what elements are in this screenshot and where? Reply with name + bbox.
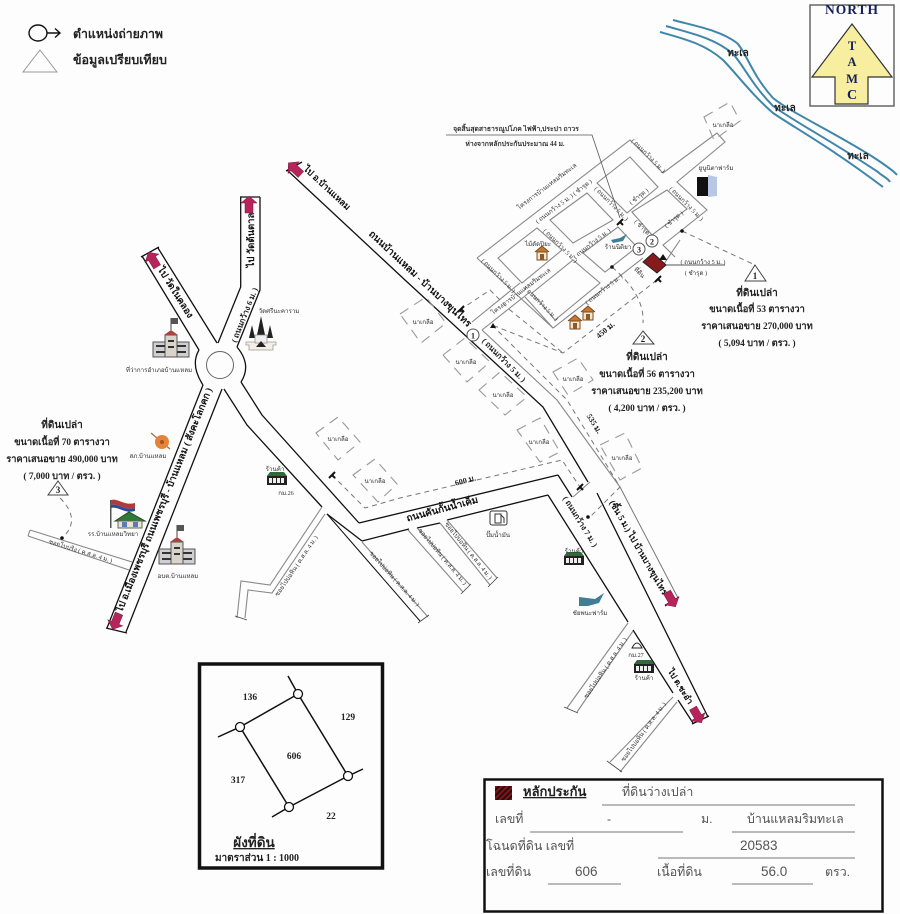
comparison 2: ( 4,200 บาท / ตรว. ) (608, 403, 686, 414)
estate road labels: ( ชำรุด ) (628, 187, 650, 206)
road labels: ( ถนนกว้าง 5 ม. ) (480, 336, 528, 384)
road labels: (ซิ้น 5 ม.) ไป บ้านบางขุนไทร (607, 497, 672, 597)
road network (28, 162, 709, 772)
comparison 1 (701, 265, 813, 349)
icon: shop in estate (611, 234, 627, 243)
road: to Bang Khun Sai (620, 487, 678, 598)
plot numbers: 606 (287, 752, 301, 762)
legend: photo position label: ตำแหน่งถ่ายภาพ (73, 27, 163, 41)
legend: photo position symbol (29, 25, 60, 41)
salt farm plots: นาเกลือ (611, 454, 633, 462)
land type: ที่ดินว่างเปล่า (622, 783, 693, 799)
dashed distance routes (60, 231, 755, 538)
estate road labels: ( ถนนกว้าง 5 ม. ) (572, 226, 612, 260)
estate road labels: ( ถนนกว้าง 5 ม. ) (542, 227, 579, 264)
address row: บ้านแหลมริมทะเล (747, 812, 844, 826)
road: north to Wat Ton Tan (218, 197, 260, 347)
river: sea: ทะเล (847, 151, 869, 162)
soi labels (48, 520, 668, 763)
landmarks (88, 164, 733, 682)
road labels: ถนนคันกั้นน้ำเค็ม (405, 492, 479, 524)
soi labels: ซอยไปบ่อหิน ( ค.ส.ล. 4 ม. ) (273, 534, 320, 598)
road labels: ไป อ.บ้านแหลม (301, 162, 353, 212)
estate road labels: ( ถนนกว้าง 5 ม. ) (593, 185, 630, 222)
sois (28, 507, 677, 772)
road labels: ไป อ.เมืองเพชรบุรี ถนนเพชรบุรี - บ้านแหลม ( สังคะโลกคก ) (113, 386, 215, 615)
river: sea (660, 20, 897, 187)
label: shop km 27: ร้านค้า (635, 674, 653, 682)
address row: ม. (701, 812, 713, 826)
comparison 1: ราคาเสนอขาย 270,000 บาท (701, 322, 813, 332)
deed row: 20583 (740, 838, 778, 853)
road: north-west to Wat Nai Khlong (142, 248, 217, 350)
river: sea: ทะเล (727, 48, 749, 59)
estate road labels: ( ถนนกว้าง 5 ม. ) (681, 258, 725, 266)
road labels (113, 162, 695, 706)
label: shop km 26: ร้านค้า (266, 465, 284, 473)
plot title: ผังที่ดิน (233, 832, 275, 850)
road labels: ไป วัดต้นตาล (245, 212, 257, 268)
icon: subdistrict office (159, 525, 195, 564)
plot numbers: 22 (326, 812, 336, 822)
road labels: ไป วัดในคลอง (154, 264, 196, 321)
plot corner pegs (236, 690, 352, 812)
road: roundabout (195, 347, 246, 385)
collateral swatch (495, 786, 512, 800)
comparison 3: ( 7,000 บาท / ตรว. ) (23, 471, 101, 482)
road labels: ( ถนนกว้าง 6 ม. ) (229, 286, 260, 344)
north arrow box: T (848, 39, 857, 53)
north arrow box: NORTH (825, 2, 879, 17)
road: grey side road (472, 283, 620, 497)
comparison 2: ที่ดินเปล่า (626, 349, 668, 363)
estate road labels: ( ถนนกว้าง 5 ม. ) (668, 185, 705, 222)
soi labels: ซอยไปบ่อหิน ( ค.ส.ล. 4 ม. ) (619, 701, 668, 763)
legend (23, 25, 167, 72)
legend: comparison label: ข้อมูลเปรียบเทียบ (73, 53, 167, 68)
estate road labels: ( ชำรุด ) (633, 219, 653, 239)
estate road labels: ( ถนนกว้าง 5 ม. ) (480, 257, 517, 294)
salt farm plots (316, 102, 740, 502)
salt farm plots: นาเกลือ (712, 121, 734, 129)
icon: houses (568, 306, 595, 329)
legend: comparison triangle (23, 50, 57, 72)
comparison 3: ขนาดเนื้อที่ 70 ตารางวา (14, 434, 110, 448)
icon: farm building (697, 175, 717, 197)
comparison 3: ที่ดินเปล่า (41, 417, 83, 431)
road: south-east road (224, 382, 359, 523)
utility callout: จุดสิ้นสุดสาธารณูปโภค ไฟฟ้า,ประปา ถาวร (453, 123, 579, 134)
estate road labels: ( ชำรุด ) (663, 210, 685, 230)
icon: police station (151, 433, 170, 449)
form lines (530, 805, 855, 884)
comparison 1: ขนาดเนื้อที่ 53 ตารางวา (709, 301, 805, 315)
panel: land plot diagram (200, 664, 382, 868)
north arrow box: C (847, 88, 857, 103)
north arrow box: M (846, 72, 858, 86)
icon: district office (153, 318, 189, 357)
deed row (486, 837, 778, 853)
panel: collateral details (484, 780, 882, 912)
estate road labels: ( ถนนกว้าง 5 ม. ) ( ชำรุด ) (534, 178, 594, 225)
parcel row: เลขที่ดิน (486, 863, 532, 879)
label: temple: วัดศรีนะคาราม (259, 307, 299, 315)
soi labels: ซอยโบบริง ( ค.ส.ล. 4 ม. ) (48, 538, 113, 565)
utility callout: ห่างจากหลักประกันประมาณ 44 ม. (465, 140, 565, 148)
photo position markers: 3 (637, 246, 641, 254)
deed row: โฉนดที่ดิน เลขที่ (486, 837, 574, 853)
estate road labels: ( ชำรุด ) (685, 270, 707, 277)
subject plot: collateral (643, 253, 666, 273)
estate road labels: โครงการบ้านแหลมริมทะเล (489, 266, 552, 316)
salt farm plots: นาเกลือ (528, 438, 550, 446)
plot scale: มาตราส่วน 1 : 1000 (215, 852, 299, 864)
label: district office: ที่ว่าการอำเภอบ้านแหลม (126, 366, 192, 374)
soi labels: ซอยไปบ่อหิน ( ค.ส.ล. 4 ม. ) (368, 549, 421, 608)
label: shop mid road: ร้านค้า (565, 547, 583, 555)
collateral heading: หลักประกัน (523, 784, 586, 799)
estate road labels: ( ถนนกว้าง 5 ม. ) (523, 285, 560, 322)
salt farm plots: นาเกลือ (327, 435, 349, 443)
salt farm plots: นาเกลือ (412, 318, 434, 326)
comparison 3: ราคาเสนอขาย 490,000 บาท (6, 455, 118, 465)
road: Ban Laem main road (287, 170, 588, 497)
small survey markers (60, 219, 684, 540)
soi labels: ซอยไปบ่อหิน ( ค.ส.ล. 4 ม. ) (443, 520, 494, 581)
comparison 1: ที่ดินเปล่า (736, 285, 778, 299)
dashed distance routes: 600 ม. (454, 474, 477, 488)
plot numbers: 129 (341, 713, 355, 723)
soi labels: ซอยไปบ่อหิน ( ค.ส.ล. 4 ม. ) (582, 636, 629, 700)
soi labels: ซอยไปบ่อหิน ( ค.ส.ล. 4 ม. ) (416, 527, 469, 587)
direction arrows (105, 157, 708, 727)
plot numbers: 317 (231, 776, 245, 786)
icon: school with flag (110, 500, 145, 528)
icon: farm (579, 593, 604, 606)
road ends (106, 162, 709, 724)
icon: shop km 26 (267, 472, 287, 485)
river: sea: ทะเล (774, 103, 796, 114)
comparison 1: ( 5,094 บาท / ตรว. ) (718, 338, 796, 349)
parcel row: 606 (575, 864, 598, 879)
road labels: ( ถนนกว้าง 7 ม. ) (561, 494, 600, 549)
road: 7 metre road (548, 493, 708, 723)
icon: shop mid road (564, 552, 584, 565)
road labels: ไป ต.ชะอำ (665, 666, 695, 706)
icon: shop km 27 (634, 660, 654, 673)
road: south-west Phetchaburi road (107, 385, 222, 632)
comparison 3: 3 (56, 485, 61, 495)
estate road labels: ( ถนนกว้าง 5 ม. ) (584, 272, 624, 306)
photo position markers (467, 235, 658, 341)
comparison 1: 1 (753, 271, 758, 281)
label: km 27: กม.27 (628, 652, 644, 659)
icon: km 27 marker (632, 643, 642, 648)
icon: temple (246, 316, 276, 350)
comparison 2: ขนาดเนื้อที่ 56 ตารางวา (599, 366, 695, 380)
label: tree nursery: ไม้ดัดปิยะ (524, 240, 551, 248)
dashed distance routes: 450 ม. (594, 320, 616, 340)
comparison 3 (6, 417, 118, 495)
dashed distance routes: 535 ม. (585, 412, 604, 435)
label: police station: สภ.บ้านแหลม (130, 452, 166, 460)
label: subdistrict office: อบต.บ้านแหลม (158, 572, 198, 580)
road labels: ถนนบ้านแหลม - บ้านบางขุนไทร (366, 227, 475, 330)
comparison 2: ราคาเสนอขาย 235,200 บาท (591, 387, 703, 397)
road: Khan Kan Nam Khem (327, 475, 558, 541)
photo position markers: 2 (650, 238, 654, 246)
salt farm plots: นาเกลือ (562, 375, 584, 383)
salt farm plots: นาเกลือ (364, 477, 386, 485)
address row: เลขที่ (495, 810, 523, 826)
parcel row: 56.0 (761, 864, 787, 879)
label: school: รร.บ้านแหลมวิทยา (88, 530, 138, 538)
label: farm building: ยูนูนิตาฟาร์ม (699, 164, 733, 172)
estate road labels (480, 137, 725, 322)
north arrow box (810, 2, 894, 106)
label: km 26: กม.26 (278, 490, 294, 497)
estate road labels: โครงการบ้านแหลมริมทะเล (515, 161, 578, 211)
parcel row: ตรว. (825, 865, 850, 879)
icon: tree nursery house (535, 246, 549, 260)
parcel row: เนื้อที่ดิน (657, 863, 702, 879)
photo position markers: 1 (471, 332, 475, 340)
plot numbers (231, 693, 355, 822)
estate road labels: ที่ดิน (632, 265, 647, 280)
comparison 2 (591, 331, 703, 414)
address row (495, 810, 844, 826)
salt farm plots: นาเกลือ (455, 358, 477, 366)
label: shop in estate: ร้านนิติยา (605, 243, 631, 251)
comparison 2: 2 (641, 334, 646, 344)
icon: petrol station (490, 511, 507, 525)
plot boundary (218, 676, 363, 817)
salt farm plots: นาเกลือ (492, 391, 514, 399)
utility callout (446, 123, 620, 218)
label: farm: ชัยพนะฟาร์ม (573, 609, 607, 617)
label: petrol station: ปั๊มน้ำมัน (486, 530, 511, 539)
north arrow box: A (847, 55, 857, 69)
housing estate grid (477, 133, 725, 328)
parcel row (486, 863, 850, 879)
address row: - (607, 812, 611, 826)
plot numbers: 136 (243, 693, 257, 703)
estate road labels: ( ถนนกว้าง 5 ม. ) (630, 137, 667, 174)
